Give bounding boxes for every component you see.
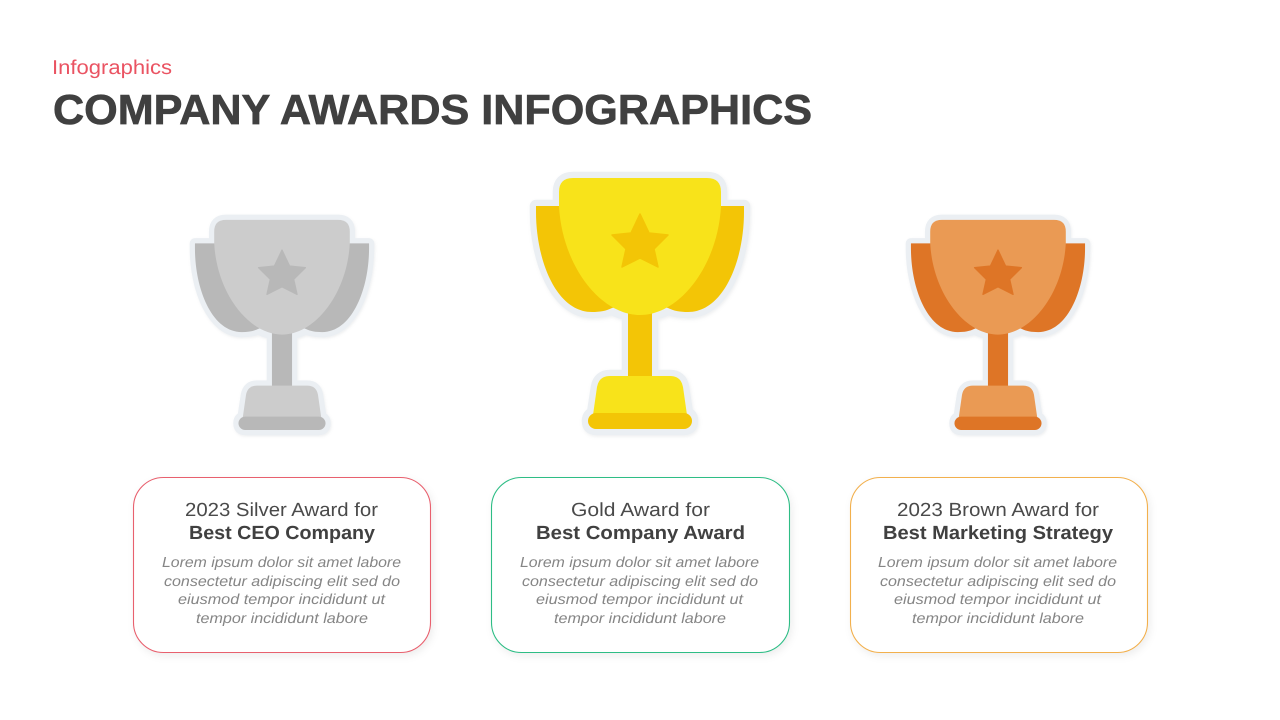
silver award description: Lorem ipsum dolor sit amet labore [162, 555, 401, 571]
icon: silver trophy [195, 220, 369, 430]
silver award heading [185, 500, 379, 544]
gold award heading: Gold Award for [571, 500, 711, 521]
gold award heading: Best Company Award [536, 523, 745, 544]
title: COMPANY AWARDS INFOGRAPHICS [53, 86, 812, 133]
brown award heading: Best Marketing Strategy [883, 523, 1113, 544]
silver award heading: 2023 Silver Award for [185, 500, 379, 521]
silver award heading: Best CEO Company [189, 523, 375, 544]
silver award description: eiusmod tempor incididunt ut [178, 592, 386, 608]
gold award description: consectetur adipiscing elit sed do [522, 574, 758, 590]
brown award description: Lorem ipsum dolor sit amet labore [878, 555, 1117, 571]
brown award description: consectetur adipiscing elit sed do [880, 574, 1116, 590]
gold award description: tempor incididunt labore [554, 611, 726, 627]
brown award description: tempor incididunt labore [912, 611, 1084, 627]
eyebrow label: Infographics [52, 57, 172, 79]
panel: gold award [492, 478, 790, 652]
brown award description: eiusmod tempor incididunt ut [894, 592, 1102, 608]
silver award description: tempor incididunt labore [196, 611, 368, 627]
gold award description [520, 555, 759, 627]
icon: gold trophy [536, 178, 744, 429]
panel: brown award [850, 478, 1148, 652]
silver award description: consectetur adipiscing elit sed do [164, 574, 400, 590]
brown award description [878, 555, 1117, 627]
brown award heading [883, 500, 1113, 544]
brown award heading: 2023 Brown Award for [897, 500, 1100, 521]
icon: bronze trophy [911, 220, 1085, 430]
gold award description: Lorem ipsum dolor sit amet labore [520, 555, 759, 571]
silver award description [162, 555, 401, 627]
panel: silver award [134, 478, 430, 652]
gold award description: eiusmod tempor incididunt ut [536, 592, 744, 608]
gold award heading [536, 500, 745, 544]
